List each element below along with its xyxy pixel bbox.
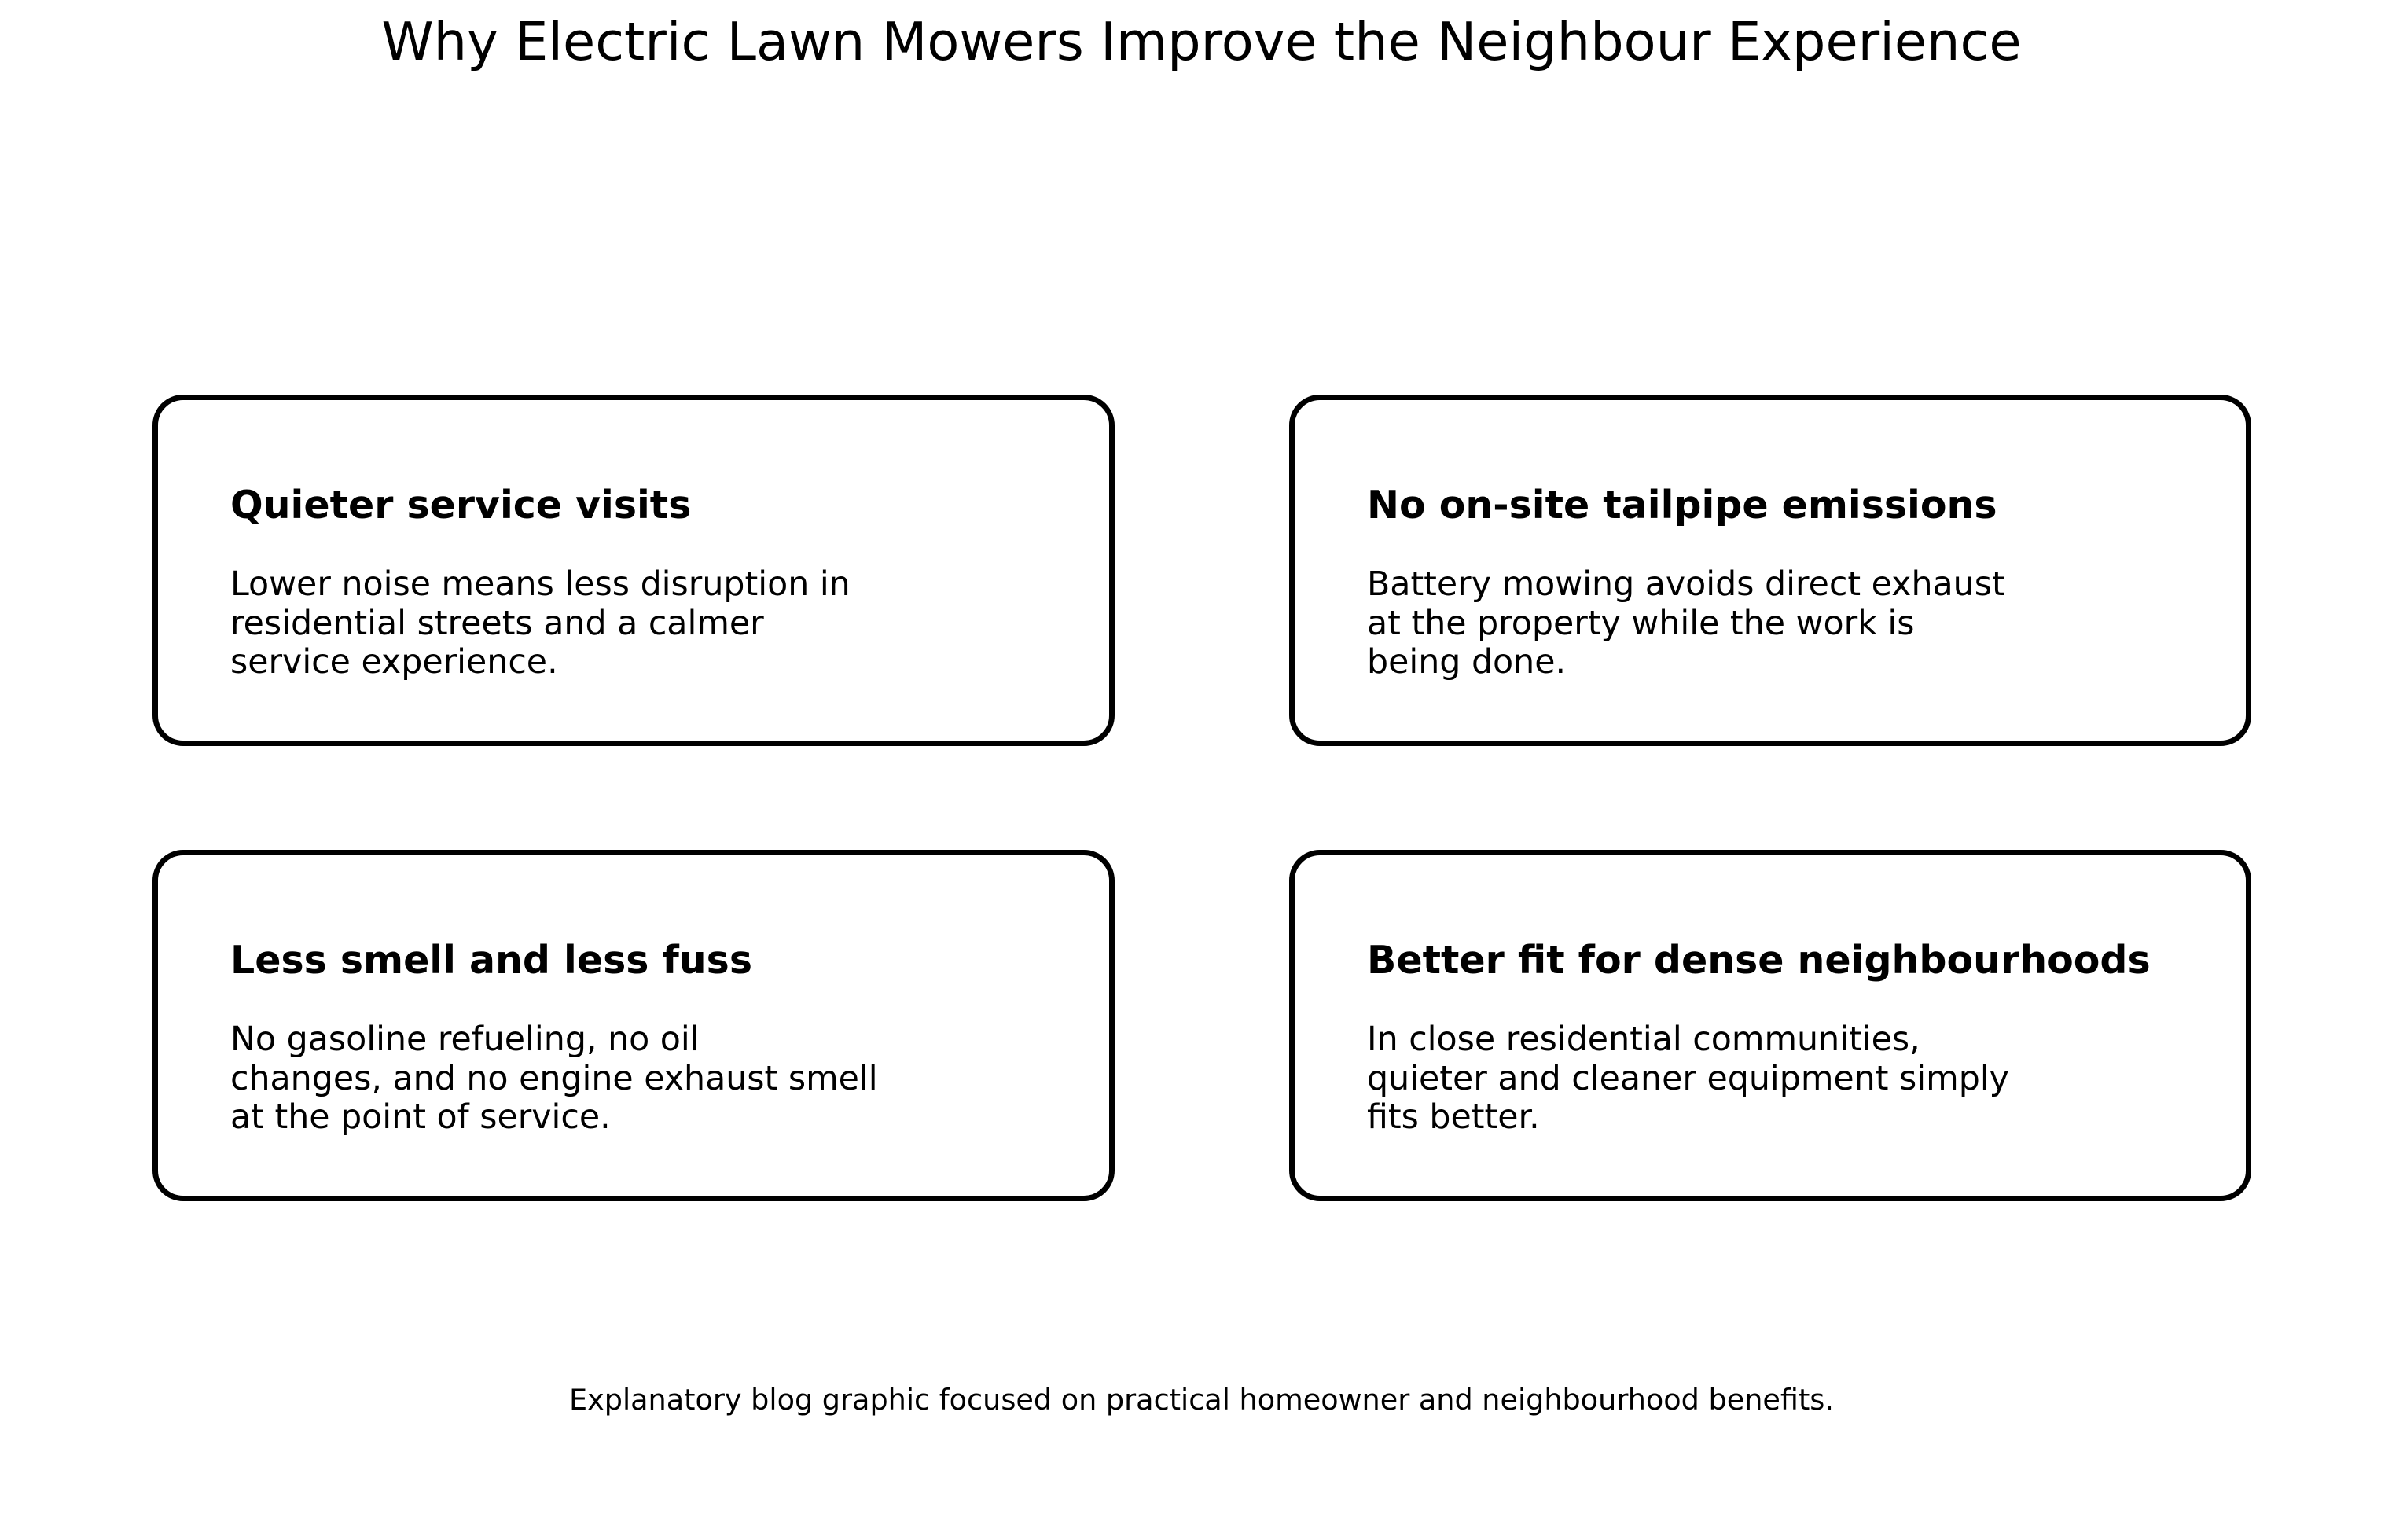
text: smell body: changes, and no engine exhaust smell bbox=[230, 1059, 878, 1098]
text: quieter body bbox=[230, 564, 851, 682]
panel: dense neighbourhoods bbox=[1289, 850, 2251, 1201]
panel: no tailpipe emissions bbox=[1289, 395, 2251, 746]
text: dense body: fits better. bbox=[1367, 1097, 1540, 1137]
panel: less smell and fuss bbox=[152, 850, 1115, 1201]
panel: quieter service visits bbox=[152, 395, 1115, 746]
text: smell body: No gasoline refueling, no oil bbox=[230, 1020, 700, 1059]
text: emissions body: at the property while the work is bbox=[1367, 604, 1915, 643]
heading: dense neighbourhoods: Better fit for dense neighbourhoods bbox=[1367, 938, 2151, 983]
text: dense body bbox=[1367, 1020, 2009, 1137]
text: smell body: at the point of service. bbox=[230, 1097, 611, 1137]
text: smell body bbox=[230, 1020, 878, 1137]
text: quieter body: residential streets and a calmer bbox=[230, 604, 764, 643]
heading: quieter service visits: Quieter service visits bbox=[230, 483, 691, 527]
heading: no tailpipe emissions: No on-site tailpipe emissions bbox=[1367, 483, 1997, 527]
text: emissions body bbox=[1367, 564, 2005, 682]
text: emissions body: Battery mowing avoids direct exhaust bbox=[1367, 564, 2005, 604]
text: dense body: In close residential communities, bbox=[1367, 1020, 1920, 1059]
title: Why Electric Lawn Mowers Improve the Neighbour Experience bbox=[381, 11, 2022, 72]
heading: less smell and fuss: Less smell and less fuss bbox=[230, 938, 752, 983]
text: dense body: quieter and cleaner equipment simply bbox=[1367, 1059, 2009, 1098]
text: emissions body: being done. bbox=[1367, 642, 1566, 682]
footer caption: Explanatory blog graphic focused on practical homeowner and neighbourhood benefits. bbox=[569, 1383, 1834, 1417]
text: quieter body: service experience. bbox=[230, 642, 558, 682]
text: quieter body: Lower noise means less disruption in bbox=[230, 564, 851, 604]
